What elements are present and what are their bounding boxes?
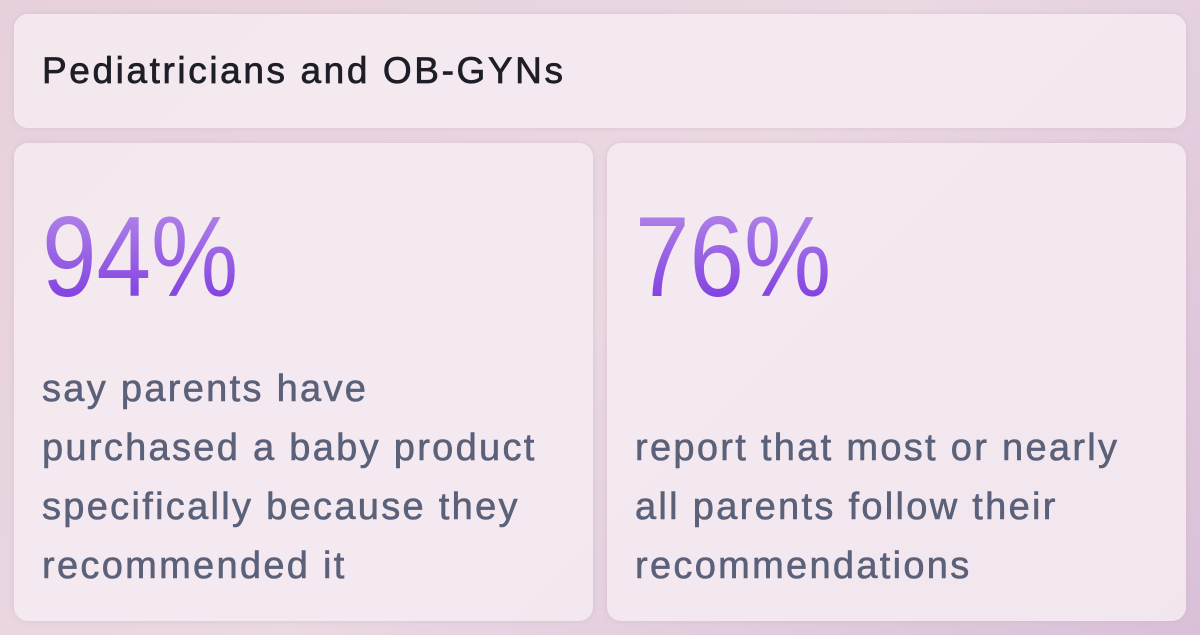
stat number: 76% bbox=[635, 194, 831, 321]
stat number: 94% bbox=[42, 194, 238, 321]
stat description bbox=[635, 427, 1119, 587]
stat description: recommended it bbox=[42, 545, 347, 587]
stat description: report that most or nearly bbox=[635, 427, 1119, 469]
stat description: recommendations bbox=[635, 545, 972, 587]
stat description: say parents have bbox=[42, 368, 368, 410]
stat description: specifically because they bbox=[42, 486, 520, 528]
title: Pediatricians and OB-GYNs bbox=[42, 50, 566, 91]
stat description: purchased a baby product bbox=[42, 427, 537, 469]
stat description bbox=[42, 368, 537, 587]
stat description: all parents follow their bbox=[635, 486, 1058, 528]
panel: 76% stat bbox=[607, 143, 1186, 621]
panel: 94% stat bbox=[14, 143, 593, 621]
panel: header bbox=[14, 14, 1186, 128]
